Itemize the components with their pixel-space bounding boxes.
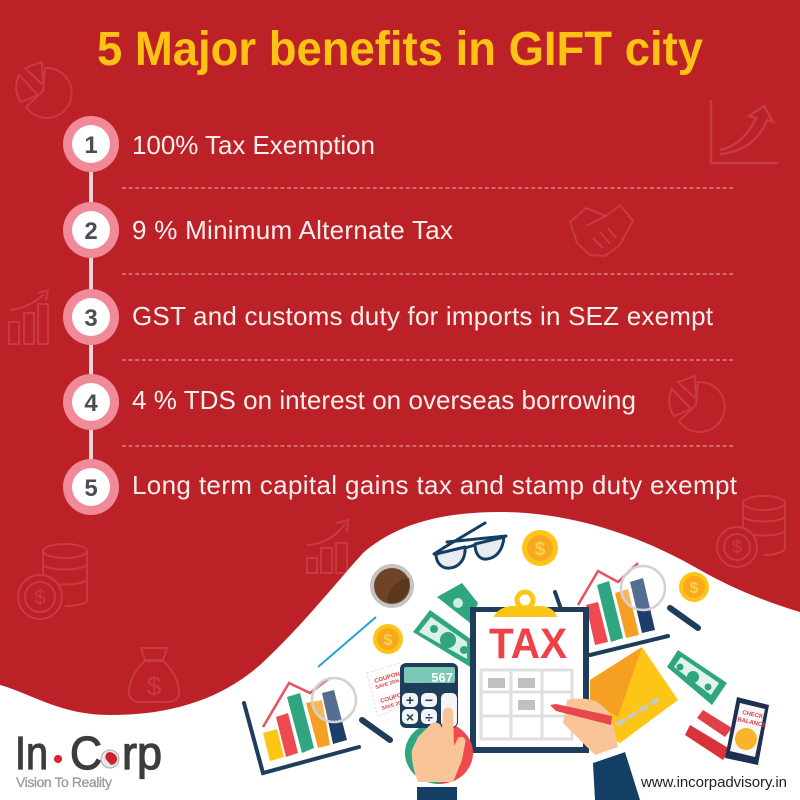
benefit 3: GST and customs duty for imports in SEZ exempt bbox=[132, 301, 714, 331]
coupons: SAVE 20% bbox=[381, 699, 407, 712]
coupons bbox=[367, 663, 412, 717]
icon: smartphone: BALANCE bbox=[737, 717, 767, 729]
benefit 5 bbox=[63, 459, 738, 515]
logo globe bbox=[101, 750, 119, 768]
icon: banknote back bbox=[437, 583, 478, 623]
icon: hand with calculator: ÷ bbox=[425, 709, 433, 725]
icon: coin left: $ bbox=[384, 632, 393, 649]
benefit 1: 100% Tax Exemption bbox=[132, 130, 375, 160]
icon: blue pen bbox=[318, 617, 376, 667]
icon: faint coin stack right bbox=[717, 496, 785, 567]
coupons: COUPON bbox=[374, 671, 401, 685]
icon: coin top bbox=[522, 530, 558, 566]
envelope bbox=[590, 647, 678, 743]
icon: coin right: $ bbox=[690, 580, 699, 597]
icon: faint coin stack left bbox=[18, 544, 87, 619]
icon: smartphone: CHECK bbox=[742, 710, 764, 721]
coupons: COUPON bbox=[380, 691, 407, 705]
clipboard bbox=[470, 592, 589, 753]
coupons: SAVE 20% bbox=[375, 678, 401, 691]
icon: faint money bag bbox=[129, 648, 179, 702]
icon: faint pie right bbox=[669, 376, 725, 432]
icon: faint handshake bbox=[570, 205, 633, 256]
icon: coin right bbox=[679, 572, 709, 602]
icon: smartphone bbox=[725, 697, 769, 765]
icon: banknote front bbox=[413, 610, 472, 668]
icon: credit cards bbox=[685, 710, 732, 760]
benefit 2: 9 % Minimum Alternate Tax bbox=[132, 215, 453, 245]
benefit 4 bbox=[63, 374, 636, 430]
icon: hand with calculator: + bbox=[406, 692, 414, 708]
background watermark icons bbox=[9, 62, 785, 702]
white wave bbox=[0, 512, 800, 800]
left bar chart bbox=[244, 678, 390, 773]
benefit 3 bbox=[63, 289, 714, 345]
logo: C bbox=[70, 727, 102, 779]
benefit 4: 4 bbox=[84, 390, 98, 417]
benefit 1 bbox=[63, 116, 375, 172]
title: 5 Major benefits in GIFT city bbox=[97, 23, 703, 76]
icon: banknote right bbox=[667, 650, 727, 705]
faint dollar signs: $ bbox=[147, 671, 162, 701]
icon: faint growth chart top right bbox=[711, 100, 778, 163]
icon: coin top: $ bbox=[535, 539, 546, 560]
icon: hand with red pen bbox=[550, 699, 640, 800]
faint dollar signs: $ bbox=[732, 537, 742, 557]
clipboard heading: TAX bbox=[489, 620, 567, 668]
logo tagline: Vision To Reality bbox=[16, 774, 112, 790]
calculator display: 567 bbox=[431, 670, 453, 685]
dashed separators bbox=[122, 188, 733, 446]
icon: coffee cup bbox=[370, 564, 414, 608]
icon: coin left bbox=[373, 624, 403, 654]
logo: rp bbox=[122, 727, 162, 779]
benefit 4: 4 % TDS on interest on overseas borrowing bbox=[132, 385, 636, 415]
benefit 5: 5 bbox=[84, 475, 98, 502]
icon: hand with calculator: × bbox=[406, 709, 414, 725]
icon: faint bar chart bottom bbox=[307, 520, 348, 573]
icon: glasses bbox=[434, 523, 506, 568]
icon: faint bar chart left bbox=[9, 290, 48, 344]
icon: hand with calculator: − bbox=[425, 692, 433, 708]
benefit 5: Long term capital gains tax and stamp duty exempt bbox=[132, 470, 738, 500]
faint dollar signs bbox=[34, 537, 742, 701]
benefit 1: 1 bbox=[84, 132, 98, 159]
website url: www.incorpadvisory.in bbox=[640, 774, 787, 791]
logo bbox=[15, 727, 162, 790]
clipboard table bbox=[481, 670, 572, 739]
timeline connector bbox=[89, 145, 93, 487]
right bar chart bbox=[555, 563, 698, 655]
icon: faint pie top left bbox=[16, 62, 72, 118]
icon: hand with calculator bbox=[400, 663, 473, 800]
benefit 3: 3 bbox=[84, 305, 98, 332]
logo: In bbox=[15, 727, 48, 779]
faint dollar signs: $ bbox=[34, 587, 46, 609]
benefit 2 bbox=[63, 202, 453, 258]
benefit 2: 2 bbox=[84, 218, 98, 245]
